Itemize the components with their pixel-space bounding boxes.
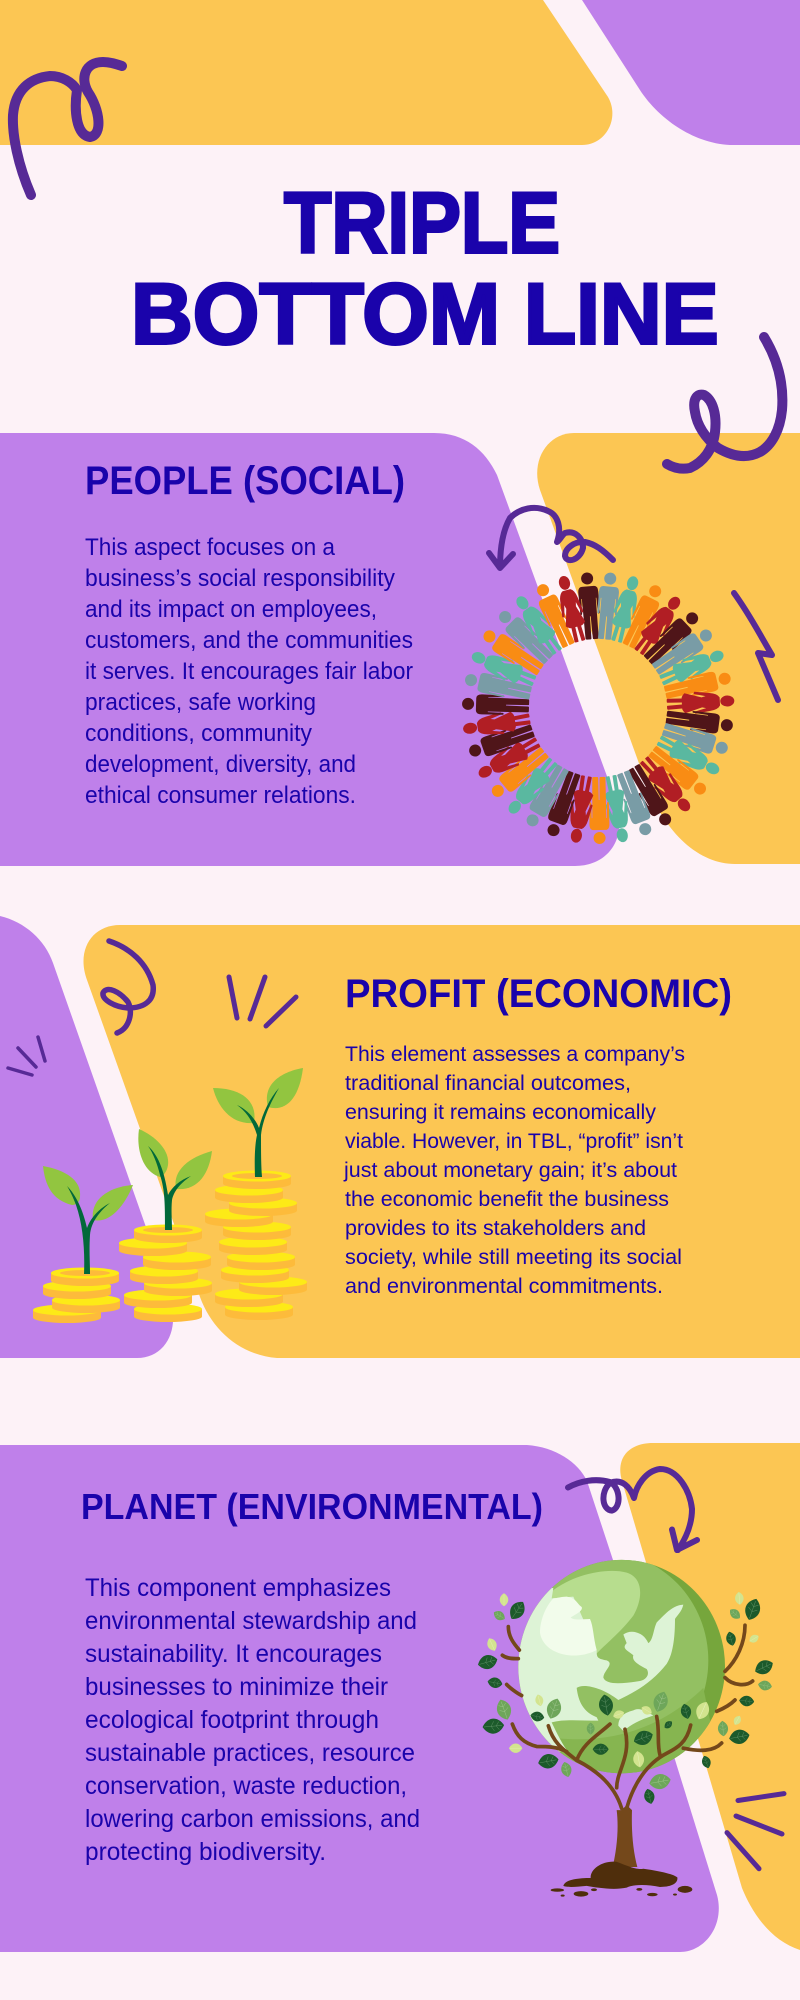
icon: burst lines near tree	[727, 1794, 784, 1869]
people purple panel	[0, 433, 620, 866]
text: profit description: viable. However, in TBL, “profit” isn’t	[345, 1129, 683, 1153]
panel: profit	[0, 916, 800, 1358]
text: profit description: ensuring it remains economically	[345, 1100, 656, 1124]
text: people description: This aspect focuses on a	[85, 534, 336, 561]
text: profit description: society, while still meeting its social	[345, 1245, 682, 1269]
icon: coin stack small with sprout	[33, 1166, 133, 1323]
heading: profit: PROFIT (ECONOMIC)	[345, 972, 732, 1016]
icon: lightning squiggle	[734, 593, 778, 700]
text: profit description: and environmental commitments.	[345, 1274, 663, 1298]
text: profit description	[343, 1042, 685, 1298]
text: people description: it serves. It encourages fair labor	[85, 658, 413, 685]
people yellow panel	[537, 433, 800, 864]
text: profit description: traditional financial outcomes,	[345, 1071, 631, 1095]
arrow: curly arrow to globe	[568, 1469, 697, 1550]
text: planet description: lowering carbon emissions, and	[85, 1805, 420, 1833]
text: people description	[85, 534, 413, 809]
icon: squiggle top left	[13, 62, 122, 195]
icon: ring of people	[461, 572, 735, 844]
tree trunk	[613, 1805, 637, 1867]
text: people description: customers, and the communities	[85, 627, 413, 654]
profit yellow panel	[83, 925, 800, 1358]
arrow: curly arrow to people	[489, 508, 613, 568]
icon: squiggle near title	[667, 337, 782, 469]
icon: globe tree	[476, 1552, 776, 1897]
planet purple panel	[0, 1445, 719, 1952]
text: planet description: sustainability. It encourages	[85, 1640, 382, 1668]
text: people description: development, diversity, and	[85, 751, 356, 778]
header corner shape: purple	[582, 0, 800, 145]
text: planet description: ecological footprint through	[85, 1706, 379, 1734]
text: planet description: sustainable practices, resource	[85, 1739, 415, 1767]
text: planet description: businesses to minimize their	[85, 1673, 388, 1701]
text: people description: conditions, community	[85, 720, 312, 747]
text: people description: practices, safe working	[85, 689, 316, 716]
icon: burst lines on purple	[8, 1037, 45, 1075]
heading: planet: PLANET (ENVIRONMENTAL)	[81, 1486, 543, 1527]
planet yellow panel	[620, 1443, 800, 1950]
icon: squiggle in profit panel	[103, 941, 153, 1033]
icon: coin stack medium with sprout	[119, 1129, 212, 1322]
soil mound	[551, 1862, 692, 1897]
title: BOTTOM LINE	[131, 266, 719, 363]
text: planet description: This component emphasizes	[85, 1574, 391, 1602]
panel: people	[0, 433, 800, 866]
heading: people: PEOPLE (SOCIAL)	[85, 459, 405, 503]
text: people description: ethical consumer relations.	[85, 782, 356, 809]
title	[131, 176, 719, 363]
leaves	[476, 1592, 776, 1805]
globe	[518, 1560, 725, 1774]
tree branches	[502, 1625, 753, 1808]
text: profit description: This element assesses a company’s	[345, 1042, 685, 1066]
text: people description: and its impact on employees,	[85, 596, 377, 623]
text: planet description: protecting biodiversity.	[85, 1838, 326, 1866]
panel: planet	[0, 1443, 800, 1952]
header banner: yellow shape	[0, 0, 612, 145]
text: planet description: environmental stewardship and	[85, 1607, 417, 1635]
text: profit description: just about monetary gain; it’s about	[343, 1158, 677, 1182]
icon: burst lines on yellow	[229, 977, 296, 1026]
text: planet description: conservation, waste reduction,	[85, 1772, 407, 1800]
icon: coin stack tall with sprout	[205, 1068, 307, 1320]
text: profit description: the economic benefit the business	[345, 1187, 669, 1211]
title: TRIPLE	[284, 176, 560, 271]
text: profit description: provides to its stakeholders and	[345, 1216, 646, 1240]
text: planet description	[85, 1574, 420, 1866]
text: people description: business’s social responsibility	[85, 565, 395, 592]
profit purple panel	[0, 916, 173, 1358]
